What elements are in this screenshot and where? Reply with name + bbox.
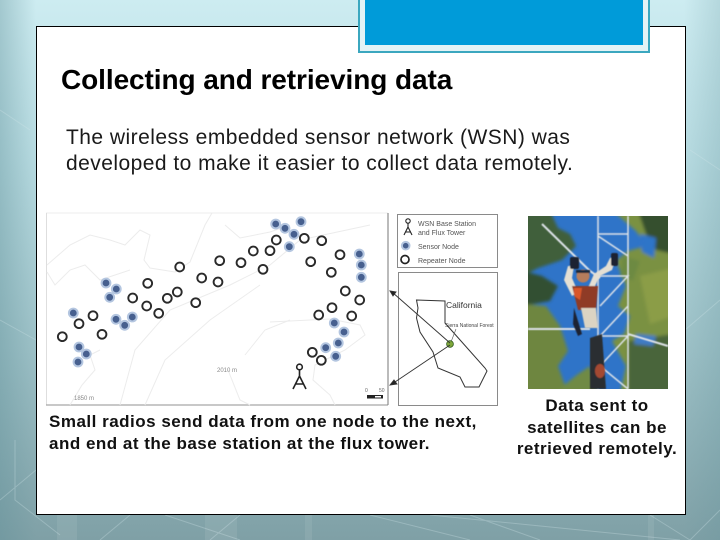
map caption: Small radios send data from one node to the next,	[49, 412, 477, 431]
legend box: and Flux Tower	[418, 230, 466, 237]
flux tower symbol	[293, 364, 306, 389]
photo caption: satellites can be	[527, 418, 667, 436]
photo caption: Data sent to	[545, 396, 649, 415]
intro text	[66, 126, 573, 175]
scale bar	[365, 388, 385, 398]
map caption	[49, 412, 477, 453]
map panel: 2010 m	[217, 368, 237, 374]
map caption: and end at the base station at the flux tower.	[49, 434, 430, 453]
photo caption: retrieved remotely.	[517, 439, 677, 458]
photo caption	[517, 396, 677, 458]
California locator map: California	[446, 300, 482, 310]
scale bar: 50	[379, 388, 385, 394]
technician	[564, 253, 618, 389]
repeater nodes	[58, 234, 364, 365]
tree foliage	[528, 216, 668, 389]
tower lattice	[528, 216, 668, 389]
blue title tab	[358, 0, 650, 53]
arrows to map	[390, 291, 450, 385]
legend box: Sensor Node	[418, 244, 459, 251]
intro text: developed to make it easier to collect data remotely.	[66, 152, 573, 175]
California locator map: Sierra National Forest	[445, 323, 494, 329]
map panel	[46, 213, 388, 405]
California locator map	[390, 272, 498, 406]
contour lines	[47, 213, 370, 405]
elevation labels: 1850 m	[74, 396, 94, 402]
legend box	[398, 214, 498, 268]
intro text: The wireless embedded sensor network (WSN) was	[66, 126, 570, 149]
sensor nodes	[69, 217, 366, 366]
legend box: WSN Base Station	[418, 221, 476, 228]
scale bar: 0	[365, 388, 368, 394]
legend box: Repeater Node	[418, 258, 466, 265]
photo: technician on flux tower	[528, 216, 668, 389]
title: Collecting and retrieving data	[61, 64, 452, 95]
